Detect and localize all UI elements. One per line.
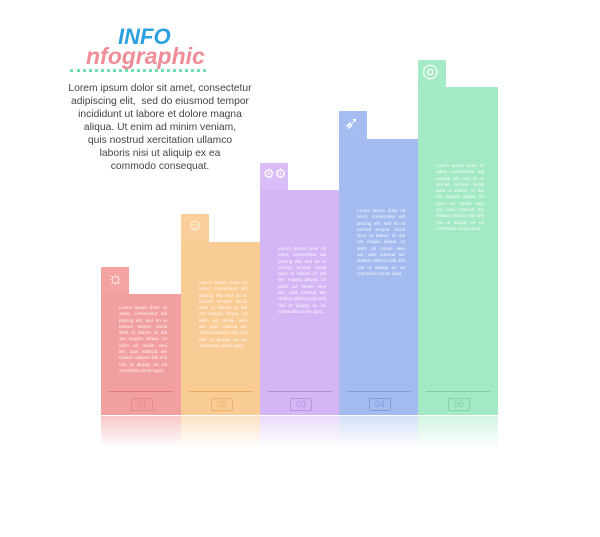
column 04: 04 <box>375 399 385 409</box>
reflection <box>101 416 498 444</box>
icon: people: ☺ <box>187 217 203 234</box>
icon: gears: ⚙⚙ <box>263 166 286 181</box>
column 05: Lorem ipsum dolor sit amet, consectetur adi piscing elit, sed do ei usmod tempor incidi dunt ut labore et dol ore magna aliqua. Ut enim ad minim veni am, quis nostrud ser citation ullamco lab oris nisi ut aliquip ex ea commodo conse quat. <box>436 163 484 231</box>
column 01: 01 <box>137 399 147 409</box>
intro text: aliqua. Ut enim ad minim veniam, <box>84 122 236 133</box>
column 05: 05 <box>454 399 464 409</box>
icon: rocket: ➶ <box>344 113 359 133</box>
column 02: 02 <box>217 399 227 409</box>
column 01 <box>101 267 181 415</box>
column 02: Lorem ipsum dolor sit amet, consectetur adi piscing elit, sed do ei usmod tempor incidi dunt ut labore et dol ore magna aliqua. Ut enim ad minim veni am, quis nostrud ser citation ullamco lab oris nisi ut aliquip ex ea commodo conse quat. <box>199 280 247 348</box>
intro text: commodo consequat. <box>111 161 209 172</box>
column 03 <box>260 163 339 415</box>
intro text: Lorem ipsum dolor sit amet, consectetur <box>68 83 252 94</box>
title <box>70 24 206 72</box>
intro text: adipiscing elit, sed do eiusmod tempor <box>71 96 249 107</box>
column 03: Lorem ipsum dolor sit amet, consectetur adi piscing elit, sed do ei usmod tempor incidi dunt ut labore et dol ore magna aliqua. Ut enim ad minim veni am, quis nostrud ser citation ullamco lab oris nisi ut aliquip ex ea commodo conse quat. <box>278 246 326 314</box>
intro text: incididunt ut labore et dolore magna <box>78 109 242 120</box>
intro text: laboris nisi ut aliquip ex ea <box>100 148 220 159</box>
intro text: quis nostrud xercitation ullamco <box>88 135 232 146</box>
column 01: Lorem ipsum dolor sit amet, consectetur adi piscing elit, sed do ei usmod tempor incidi dunt ut labore et dol ore magna aliqua. Ut enim ad minim veni am, quis nostrud ser citation ullamco lab oris nisi ut aliquip ex ea commodo conse quat. <box>119 305 167 373</box>
title: nfographic <box>86 43 205 69</box>
column 04 <box>339 111 418 415</box>
column 05 <box>418 60 498 415</box>
column 04: Lorem ipsum dolor sit amet, consectetur adi piscing elit, sed do ei usmod tempor incidi dunt ut labore et dol ore magna aliqua. Ut enim ad minim veni am, quis nostrud ser citation ullamco lab oris nisi ut aliquip ex ea commodo conse quat. <box>357 208 405 276</box>
title: INFO <box>118 24 171 49</box>
icon: target: ◎ <box>422 61 439 82</box>
column 02 <box>181 214 260 415</box>
icon: bulb: ☼ <box>107 268 124 288</box>
intro text <box>68 83 252 172</box>
column 03: 03 <box>296 399 306 409</box>
